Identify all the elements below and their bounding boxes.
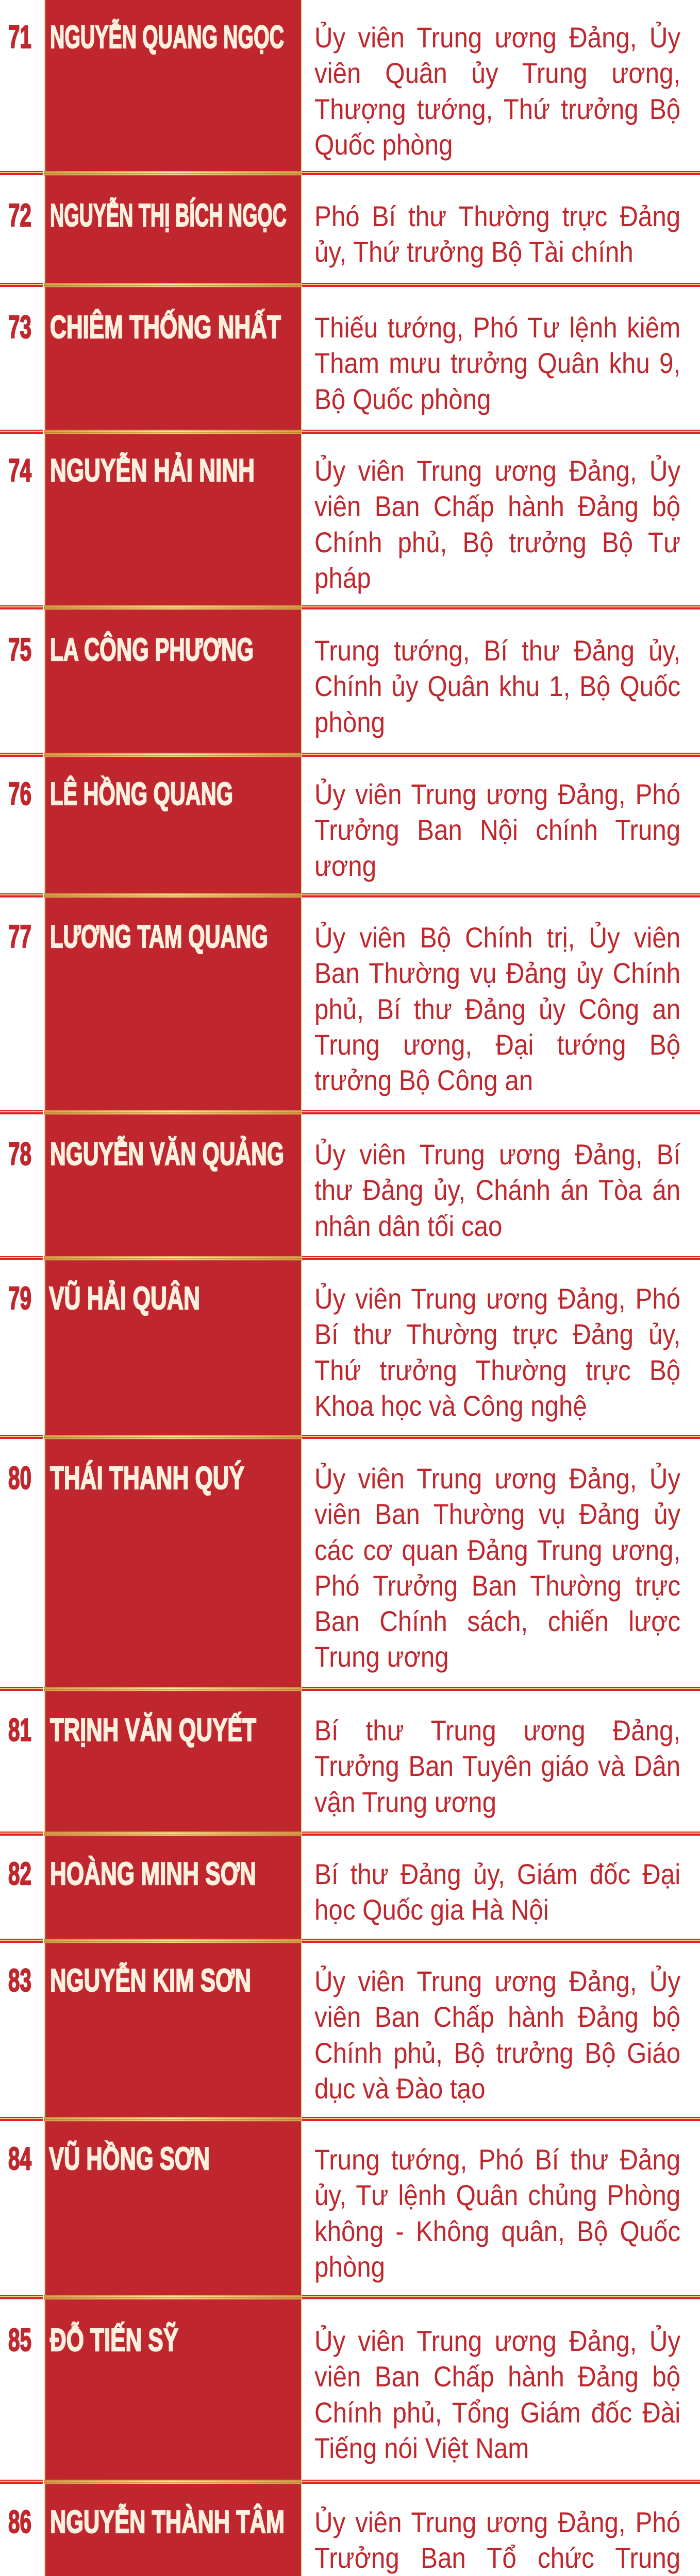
row 74 [8,452,680,594]
position text 81: vận Trung ương [314,1786,496,1818]
row 80 [8,1460,680,1673]
position text 74 [314,454,680,594]
number and name 71: 71 [8,20,31,55]
number and name 84: VŨ HỒNG SƠN [49,2141,210,2177]
position text 79: Bí thư Thường trực Đảng ủy, [314,1318,680,1350]
position text 72: ủy, Thứ trưởng Bộ Tài chính [314,235,634,268]
position text 79 [314,1282,680,1422]
position text 78: Ủy viên Trung ương Đảng, Bí [314,1138,680,1171]
position text 73: Bộ Quốc phòng [314,383,491,415]
position text 81: Trưởng Ban Tuyên giáo và Dân [314,1750,680,1782]
number and name 76: 76 [8,776,31,812]
number and name 85 [0,2320,300,2361]
position text 84: Trung tướng, Phó Bí thư Đảng [314,2143,680,2176]
position text 74: Ủy viên Trung ương Đảng, Ủy [314,454,680,487]
row 73 [8,309,680,415]
position text 74: Chính phủ, Bộ trưởng Bộ Tư [314,526,680,558]
position text 80: Trung ương [314,1640,449,1673]
position text 75: Trung tướng, Bí thư Đảng ủy, [314,634,680,667]
number and name 74: 74 [8,453,31,488]
position text 79: Thứ trưởng Thường trực Bộ [314,1354,680,1386]
number and name 76 [8,775,233,812]
row 76 [8,775,680,882]
row 84 [0,2120,700,2295]
position text 76 [314,778,680,882]
position text 80: Ban Chính sách, chiến lược [314,1605,680,1637]
number and name 79: VŨ HẢI QUÂN [49,1281,200,1316]
position text 71 [314,21,680,161]
position text 86: Ủy viên Trung ương Đảng, Phó [314,2506,680,2538]
position text 80 [314,1462,680,1673]
position text 81: Bí thư Trung ương Đảng, [314,1714,680,1747]
position text 86: Trưởng Ban Tổ chức Trung [314,2541,680,2574]
position text 71: Quốc phòng [314,128,453,161]
number and name 73: 73 [8,310,31,345]
position text 75: Chính ủy Quân khu 1, Bộ Quốc [314,670,680,702]
row 72 [8,197,680,268]
position text 77: phủ, Bí thư Đảng ủy Công an [314,993,680,1025]
position text 73: Tham mưu trưởng Quân khu 9, [314,347,680,379]
position text 82 [314,1858,680,1926]
position text 84: phòng [314,2250,385,2283]
position text 82: học Quốc gia Hà Nội [314,1893,549,1926]
position text 73: Thiếu tướng, Phó Tư lệnh kiêm [314,311,680,344]
position text 76: Ủy viên Trung ương Đảng, Phó [314,778,680,810]
position text 83 [314,1965,680,2105]
number and name 77: 77 [8,919,31,955]
position text 85: Tiếng nói Việt Nam [314,2432,529,2464]
number and name 79: 79 [8,1281,31,1316]
row 75 [8,631,680,738]
position text 84: ủy, Tư lệnh Quân chủng Phòng [314,2179,680,2211]
red name column [44,0,302,2576]
number and name 82: 82 [8,1856,31,1892]
number and name 82 [8,1856,256,1892]
position text 74: pháp [314,562,371,594]
row 83 [8,1962,680,2105]
position text 80: các cơ quan Đảng Trung ương, [314,1534,680,1566]
position text 83: viên Ban Chấp hành Đảng bộ [314,2001,680,2033]
position text 83: Ủy viên Trung ương Đảng, Ủy [314,1965,680,1997]
number and name 86: 86 [8,2504,31,2540]
position text 75: phòng [314,706,385,738]
number and name 81: 81 [8,1713,31,1748]
number and name 80: 80 [8,1461,31,1496]
number and name 84: 84 [8,2141,31,2177]
position text 71: Thượng tướng, Thứ trưởng Bộ [314,93,680,125]
number and name 83 [8,1962,251,1998]
number and name 83: 83 [8,1963,31,1998]
position text 71: Ủy viên Trung ương Đảng, Ủy [314,21,680,54]
position text 78 [314,1138,680,1242]
number and name 72: 72 [8,198,31,233]
position text 80: Phó Trưởng Ban Thường trực [314,1569,680,1602]
position text 71: viên Quân ủy Trung ương, [314,57,680,89]
row 77 [8,919,680,1096]
position text 73 [314,311,680,415]
number and name 85: 85 [8,2323,31,2358]
position text 77: Ủy viên Bộ Chính trị, Ủy viên [314,921,680,954]
number and name 75 [8,631,254,668]
position text 76: Trưởng Ban Nội chính Trung [314,814,680,846]
position text 76: ương [314,850,376,882]
position text 77: Ban Thường vụ Đảng ủy Chính [314,957,680,989]
position text 78: thư Đảng ủy, Chánh án Tòa án [314,1174,680,1206]
position text 85: Chính phủ, Tổng Giám đốc Đài [314,2396,680,2429]
position text 77 [314,921,680,1096]
number and name 74 [8,452,255,488]
dividers [0,171,700,176]
position text 72: Phó Bí thư Thường trực Đảng [314,200,680,232]
position text 77: Trung ương, Đại tướng Bộ [314,1028,680,1061]
row 82 [8,1856,680,1926]
position text 83: Chính phủ, Bộ trưởng Bộ Giáo [314,2037,680,2069]
position text 75 [314,634,680,738]
position text 84 [314,2142,680,2284]
position text 83: dục và Đào tạo [314,2072,485,2105]
row 81 [8,1711,680,1818]
position text 85: viên Ban Chấp hành Đảng bộ [314,2360,680,2393]
row 85 [0,2298,700,2480]
position text 84: không - Không quân, Bộ Quốc [314,2215,680,2247]
position text 86 [314,2504,680,2576]
number and name 75: 75 [8,632,31,668]
number and name 78: 78 [8,1137,31,1172]
row 79 [8,1280,680,1422]
number and name 80 [8,1460,245,1496]
position text 85 [314,2323,680,2466]
position text 80: viên Ban Thường vụ Đảng ủy [314,1498,680,1530]
position text 81 [314,1714,680,1818]
number and name 84 [0,2139,300,2180]
row 71 [8,19,680,161]
number and name 79 [8,1280,200,1316]
position text 77: trưởng Bộ Công an [314,1064,533,1096]
row 78 [8,1136,680,1242]
position text 74: viên Ban Chấp hành Đảng bộ [314,490,680,522]
position text 78: nhân dân tối cao [314,1210,502,1242]
row 86 [0,2482,700,2576]
position text 82: Bí thư Đảng ủy, Giám đốc Đại [314,1858,680,1890]
number and name 85: ĐỖ TIẾN SỸ [50,2323,178,2358]
position text 80: Ủy viên Trung ương Đảng, Ủy [314,1462,680,1495]
position text 79: Ủy viên Trung ương Đảng, Phó [314,1282,680,1315]
position text 79: Khoa học và Công nghệ [314,1389,587,1422]
position text 72 [314,200,680,268]
number and name 81 [8,1711,257,1748]
position text 85: Ủy viên Trung ương Đảng, Ủy [314,2325,680,2357]
